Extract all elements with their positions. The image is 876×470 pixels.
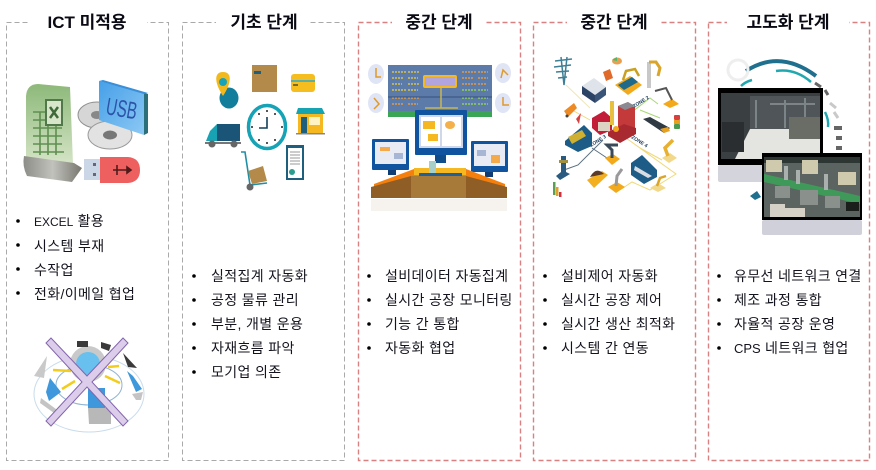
- icon: robot bottom: [608, 169, 625, 193]
- list: ICT 미적용: EXCEL 활용: [34, 213, 104, 229]
- list: 중간 단계 제어: 실시간 생산 최적화: [561, 316, 675, 332]
- list: 중간 단계: 설비데이터 자동집계: [385, 268, 508, 284]
- panel: 중간 단계 (설비데이터): [358, 13, 520, 460]
- list: 기초 단계: [192, 268, 308, 380]
- icon: zone labels: ZONE 2: [632, 95, 651, 110]
- icon: zone labels: ZONE 4: [630, 135, 649, 149]
- icon: main monitor: [415, 110, 467, 163]
- icon: gantry robot: [647, 62, 660, 88]
- heading: 고도화 단계: 고도화 단계: [747, 13, 829, 32]
- icon: location pin and globe: [216, 72, 238, 108]
- panel: 고도화 단계: [708, 13, 870, 460]
- icon: robot on conveyor: [615, 69, 642, 95]
- icon: 3D production line monitor: [762, 153, 862, 235]
- list: 기초 단계: 공정 물류 관리: [211, 292, 299, 308]
- icon: belt conveyor: [643, 117, 670, 133]
- icon: zone labels: [589, 95, 651, 149]
- chart: departures status board: [388, 65, 492, 117]
- icon: crossed-out network: [34, 338, 144, 432]
- list: 고도화 단계: CPS 네트워크 협업: [734, 340, 849, 356]
- icon: blue machine tool: [565, 125, 592, 152]
- icon: colour ball: [612, 57, 622, 64]
- list: 기초 단계: 실적집계 자동화: [211, 268, 308, 284]
- diagram: isometric smart factory: [553, 57, 680, 197]
- icon: USB box: [99, 80, 148, 135]
- list: ICT 미적용: 전화/이메일 협업: [34, 286, 135, 302]
- icon: HUD arcs background: [728, 60, 842, 200]
- icon: clock: [248, 106, 286, 148]
- heading: 중간 단계: 중간 단계: [580, 13, 648, 32]
- icon: machine left: [556, 156, 570, 180]
- icon: Excel file: [23, 84, 82, 182]
- list: 중간 단계: 자동화 협업: [385, 340, 455, 356]
- icon: parcel box: [252, 65, 277, 92]
- list: 기초 단계: 부분, 개별 운용: [211, 316, 303, 332]
- heading: 중간 단계: 중간 단계: [405, 13, 473, 32]
- icon: credit card: [291, 74, 315, 92]
- icon: orange lift: [603, 69, 613, 81]
- list: 중간 단계: 기능 간 통합: [385, 316, 460, 332]
- icon: robot bottom right: [650, 176, 666, 192]
- panel: ICT 미적용: [6, 13, 168, 460]
- icon: small bar chart: [553, 182, 562, 197]
- list: ICT 미적용: [16, 213, 135, 302]
- icon: blue press: [631, 155, 657, 184]
- icon: warehouse: [582, 78, 606, 103]
- list: 기초 단계: 자재흐름 파악: [211, 340, 295, 356]
- list: ICT 미적용: 시스템 부재: [34, 238, 104, 254]
- icon: clipboard: [286, 145, 304, 180]
- list: 중간 단계 제어: 시스템 간 연동: [561, 340, 649, 356]
- icon: factory floor monitor: [718, 88, 823, 182]
- icon: control desk: [371, 161, 507, 211]
- list: 고도화 단계: [717, 268, 862, 356]
- list: 중간 단계: [367, 268, 513, 356]
- list: 중간 단계: 실시간 공장 모니터링: [385, 292, 513, 308]
- icon: zone labels: ZONE 3: [589, 134, 608, 149]
- icon: central factory: [592, 101, 636, 143]
- list: ICT 미적용: 수작업: [34, 262, 74, 278]
- heading: ICT 미적용: ICT 미적용: [47, 13, 127, 32]
- icon: cart: [587, 171, 608, 188]
- connector lines: [564, 85, 676, 190]
- icon: truck: [205, 124, 241, 148]
- icon: robot right: [662, 140, 677, 163]
- list: 고도화 단계: 유무선 네트워크 연결: [734, 268, 862, 284]
- icon: robot centre: [605, 145, 620, 165]
- list: 고도화 단계: 제조 과정 통합: [734, 292, 822, 308]
- list: 기초 단계: 모기업 의존: [211, 364, 281, 380]
- icon: CD discs: [78, 102, 132, 149]
- icon: wall clocks: [368, 63, 511, 113]
- icon: power pylon: [554, 57, 572, 85]
- list: 고도화 단계: 자율적 공장 운영: [734, 316, 835, 332]
- heading: 기초 단계: 기초 단계: [230, 13, 298, 32]
- icon: robot cell: [655, 88, 679, 108]
- icon: USB box: USB: [104, 94, 139, 125]
- icon: signal tower: [674, 115, 680, 129]
- list: 중간 단계 제어: [543, 268, 675, 356]
- panel: 기초 단계: [182, 13, 344, 460]
- icon: left monitor: [372, 139, 409, 175]
- icon: hand truck: [241, 152, 267, 190]
- panel: 중간 단계 (설비제어): [534, 13, 696, 460]
- list: 중간 단계 제어: 실시간 공장 제어: [561, 292, 662, 308]
- icon: shop: [296, 108, 325, 134]
- list: 중간 단계 제어: 설비제어 자동화: [561, 268, 658, 284]
- icon: USB stick: [84, 157, 140, 183]
- icon: right monitor: [471, 141, 508, 177]
- icon: orange truck: [564, 103, 581, 124]
